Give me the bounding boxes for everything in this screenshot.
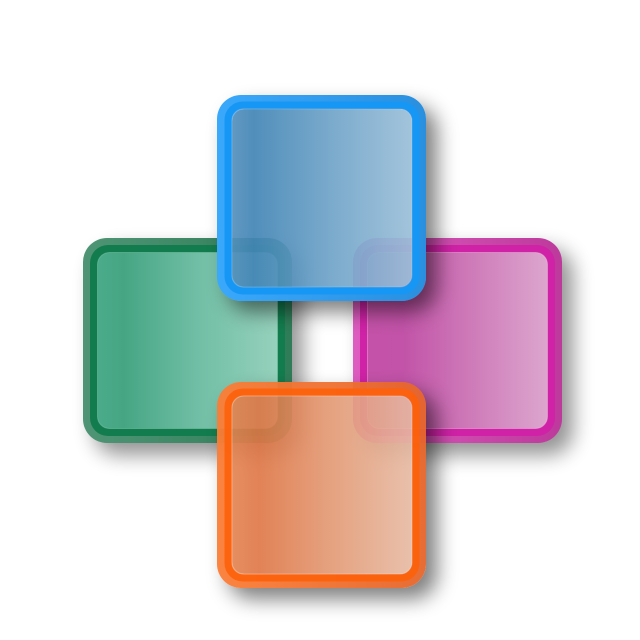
green outer ring — [83, 238, 292, 443]
panel: blue square — [217, 95, 426, 301]
green face — [98, 252, 278, 428]
magenta middle ring — [360, 245, 555, 436]
orange outer ring — [217, 382, 426, 588]
panel: magenta square — [353, 238, 573, 455]
green drop shadow — [94, 249, 303, 455]
magenta face — [368, 252, 548, 428]
panel: green square — [83, 238, 303, 455]
shadow: orange square — [228, 393, 437, 599]
orange middle ring — [228, 392, 416, 578]
green middle ring — [90, 245, 285, 436]
magenta outer ring — [353, 238, 562, 443]
magenta drop shadow — [364, 249, 573, 455]
shadow: blue square — [228, 106, 437, 312]
orange face — [232, 396, 412, 574]
blue outer ring — [217, 95, 426, 301]
blue middle ring — [228, 105, 416, 291]
blue face — [232, 109, 412, 287]
infographic: four overlapping rounded squares — [80, 92, 586, 614]
panel: orange square — [217, 382, 426, 588]
